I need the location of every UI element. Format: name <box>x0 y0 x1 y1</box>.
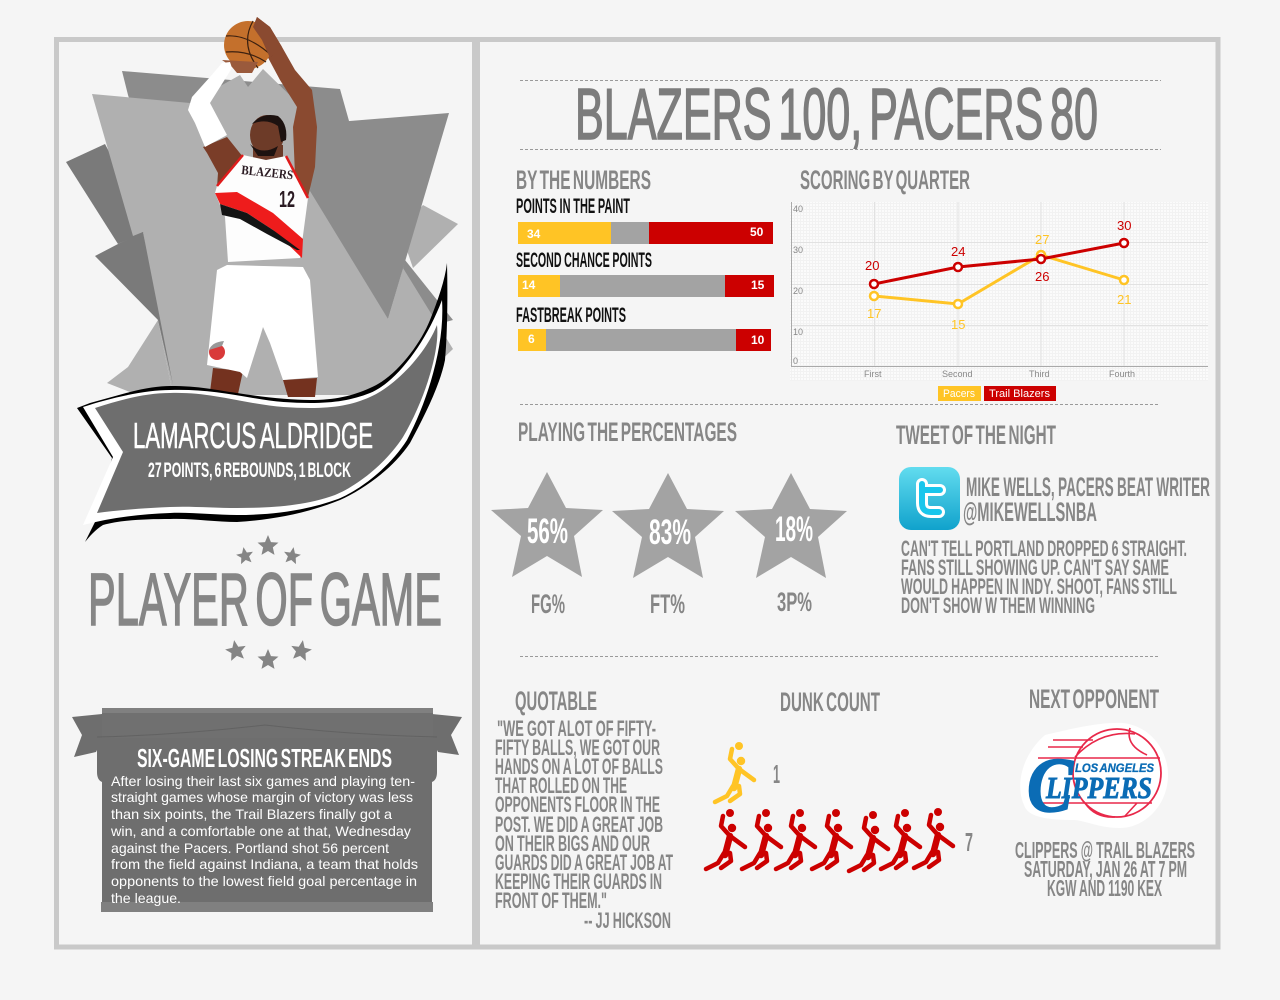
bar: second chance points: 14 <box>522 278 536 292</box>
story body: After losing their last six games and playing ten- <box>111 773 415 789</box>
heading: quotable: QUOTABLE <box>515 686 597 716</box>
legend: Pacers <box>943 388 975 400</box>
bar: second chance points: 15 <box>751 278 765 292</box>
x axis labels: First <box>864 369 882 379</box>
jersey lettering: BLAZERS <box>241 162 294 182</box>
panel: six-game losing streak story <box>72 708 462 912</box>
stat star: field goal percentage <box>491 472 603 619</box>
quote text: "WE GOT ALOT OF FIFTY- <box>497 716 656 741</box>
quote text: KEEPING THEIR GUARDS IN <box>495 869 662 894</box>
dunk icons: Trail Blazers: 7 <box>965 827 973 857</box>
arm sleeve <box>188 62 232 147</box>
shorts <box>207 265 318 380</box>
series: Pacers: 21 <box>1117 292 1131 307</box>
player photo: LaMarcus Aldridge shooting: 12 <box>279 186 295 212</box>
quote text: HANDS ON A LOT OF BALLS <box>495 754 663 779</box>
dunk icons: Pacers <box>715 742 780 802</box>
stat star: three point percentage: 18% <box>775 510 813 549</box>
bar: points in the paint: 50 <box>750 225 764 239</box>
heading: player of game: PLAYER OF GAME <box>88 558 442 641</box>
quote text: ON THEIR BIGS AND OUR <box>495 831 650 856</box>
logo: LA Clippers: C <box>1027 741 1074 828</box>
y axis labels: 20 <box>793 286 803 296</box>
text: 1 <box>773 759 780 789</box>
logo: LA Clippers <box>1020 723 1168 828</box>
bar: fastbreak points <box>516 304 771 351</box>
next game details <box>1015 837 1195 901</box>
quote text: POST. WE DID A GREAT JOB <box>495 812 663 837</box>
story body: straight games whose margin of victory was less <box>111 789 413 805</box>
x axis labels: Fourth <box>1109 369 1135 379</box>
y axis labels: 30 <box>793 245 803 255</box>
bar: points in the paint: POINTS IN THE PAINT <box>516 195 630 218</box>
player graphic: angular background shapes <box>66 69 458 395</box>
series: Pacers: 15 <box>951 317 965 332</box>
dunk icons: Trail Blazers <box>706 808 973 871</box>
heading: playing the percentages: PLAYING THE PERCENTAGES <box>518 417 737 447</box>
player stat line: 27 POINTS, 6 REBOUNDS, 1 BLOCK <box>148 459 351 482</box>
line chart: scoring by quarter <box>790 202 1208 401</box>
stat star: free throw percentage <box>612 473 724 619</box>
stars above player of game <box>235 535 302 565</box>
player name: LAMARCUS ALDRIDGE <box>133 415 373 456</box>
story body: from the field against Indiana, a team that holds <box>111 856 418 872</box>
jersey <box>215 155 308 262</box>
x axis labels: Second <box>942 369 973 379</box>
x axis labels: Third <box>1029 369 1050 379</box>
stat star: free throw percentage: 83% <box>649 513 691 552</box>
tweet author: @MIKEWELLSNBA <box>963 497 1097 527</box>
quote text: OPPONENTS FLOOR IN THE <box>495 792 660 817</box>
head <box>253 145 283 163</box>
story headline: SIX-GAME LOSING STREAK ENDS <box>137 743 392 773</box>
story body <box>110 773 418 906</box>
quote text: GUARDS DID A GREAT JOB AT <box>495 850 673 875</box>
icon: twitter <box>899 467 960 530</box>
quote text <box>495 716 673 933</box>
tweet text: DON'T SHOW W THEM WINNING <box>901 593 1095 618</box>
bar: fastbreak points: 10 <box>751 333 765 347</box>
story body: than six points, the Trail Blazers finally got a <box>111 806 392 822</box>
x axis labels <box>864 369 1135 379</box>
heading: next opponent: NEXT OPPONENT <box>1029 684 1159 714</box>
heading: tweet of the night: TWEET OF THE NIGHT <box>896 420 1056 450</box>
series: Trail Blazers: 30 <box>1117 218 1131 233</box>
tweet author <box>963 472 1210 527</box>
bar: fastbreak points: FASTBREAK POINTS <box>516 304 626 327</box>
series: Pacers <box>867 232 1131 332</box>
bar: second chance points <box>516 249 774 297</box>
quote text: -- JJ HICKSON <box>584 908 671 933</box>
player photo: LaMarcus Aldridge shooting <box>188 17 318 397</box>
logo: LA Clippers: LIPPERS <box>1045 770 1152 805</box>
basketball <box>224 21 272 69</box>
series: Trail Blazers: 24 <box>951 244 965 259</box>
heading: by the numbers: BY THE NUMBERS <box>516 165 651 195</box>
story body: against the Pacers. Portland shot 56 percent <box>111 840 389 856</box>
heading: dunk count: DUNK COUNT <box>780 687 880 717</box>
y axis labels: 0 <box>793 356 798 366</box>
series: Pacers: 17 <box>867 306 881 321</box>
legend: Trail Blazers <box>989 388 1050 400</box>
y axis labels: 10 <box>793 327 803 337</box>
legs <box>210 368 243 394</box>
stat star: field goal percentage: 56% <box>527 512 568 551</box>
stat star: three point percentage: 3P% <box>777 587 812 617</box>
story body: the league. <box>111 890 181 906</box>
stat star: field goal percentage: FG% <box>531 589 565 619</box>
series: Pacers: 27 <box>1035 232 1049 247</box>
stat star: three point percentage <box>735 473 847 617</box>
name ribbon <box>77 263 447 542</box>
upper arm <box>203 137 243 187</box>
bar: points in the paint: 34 <box>527 227 541 241</box>
bar: second chance points: SECOND CHANCE POINTS <box>516 249 652 272</box>
next game details: KGW AND 1190 KEX <box>1047 875 1162 901</box>
story body: opponents to the lowest field goal percentage in <box>111 873 417 889</box>
y axis labels: 40 <box>793 204 803 214</box>
series: Trail Blazers: 26 <box>1035 269 1049 284</box>
series: Trail Blazers <box>865 218 1131 288</box>
bar: fastbreak points: 6 <box>528 332 535 346</box>
series: Trail Blazers: 20 <box>865 258 879 273</box>
y axis labels <box>793 204 803 366</box>
quote text: FRONT OF THEM." <box>495 888 607 913</box>
stars below player of game <box>224 638 313 669</box>
heading: scoring by quarter: SCORING BY QUARTER <box>800 165 970 195</box>
bar: points in the paint <box>516 195 773 244</box>
tweet text <box>901 536 1187 618</box>
legend <box>938 386 1056 401</box>
quote text: FIFTY BALLS, WE GOT OUR <box>495 735 660 760</box>
story body: win, and a comfortable one at that, Wednesday <box>110 823 411 839</box>
quote text: THAT ROLLED ON THE <box>495 773 627 798</box>
logo: LA Clippers: LOS ANGELES <box>1075 761 1154 775</box>
raised arm <box>253 17 317 197</box>
stat star: free throw percentage: FT% <box>650 589 685 619</box>
